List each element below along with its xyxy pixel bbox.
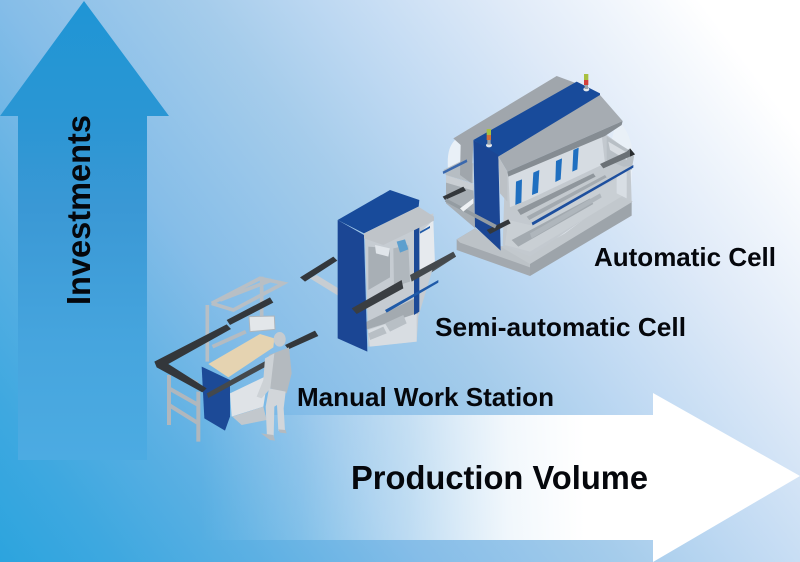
gray hood <box>364 207 434 245</box>
blue column <box>473 140 501 251</box>
label: automatic cell: Automatic Cell <box>594 242 776 272</box>
blue top panel <box>473 82 600 157</box>
arrow: investments <box>0 1 169 460</box>
axis label: investments: Investments <box>60 115 97 305</box>
label: manual work station: Manual Work Station <box>297 382 554 412</box>
machine: semi-automatic cell <box>300 190 456 352</box>
machine: automatic cell <box>430 74 635 276</box>
monitor <box>249 316 275 332</box>
blue actuators <box>515 148 579 205</box>
inner rail <box>168 368 198 385</box>
legs <box>169 375 198 442</box>
conveyor stubs <box>443 187 466 200</box>
machine: manual work station <box>154 277 318 442</box>
signal tower <box>583 74 589 91</box>
blue column <box>338 220 367 352</box>
blue cabinet <box>202 367 230 431</box>
base <box>457 228 530 276</box>
table top <box>208 334 274 377</box>
human figure <box>257 332 292 441</box>
axis label: production volume: Production Volume <box>351 459 648 496</box>
tray <box>507 166 632 223</box>
blue right post <box>414 227 419 315</box>
interior <box>503 135 632 257</box>
front blue rail <box>532 165 633 225</box>
conveyors <box>352 280 403 314</box>
blue top <box>338 190 419 233</box>
label: semi-automatic cell: Semi-automatic Cell <box>435 312 686 342</box>
signal tower <box>486 129 492 147</box>
overhead frame <box>207 277 283 362</box>
conveyors <box>154 324 231 392</box>
rear hood <box>453 76 577 183</box>
arrow: production volume <box>200 393 800 562</box>
gray hood <box>498 95 623 172</box>
